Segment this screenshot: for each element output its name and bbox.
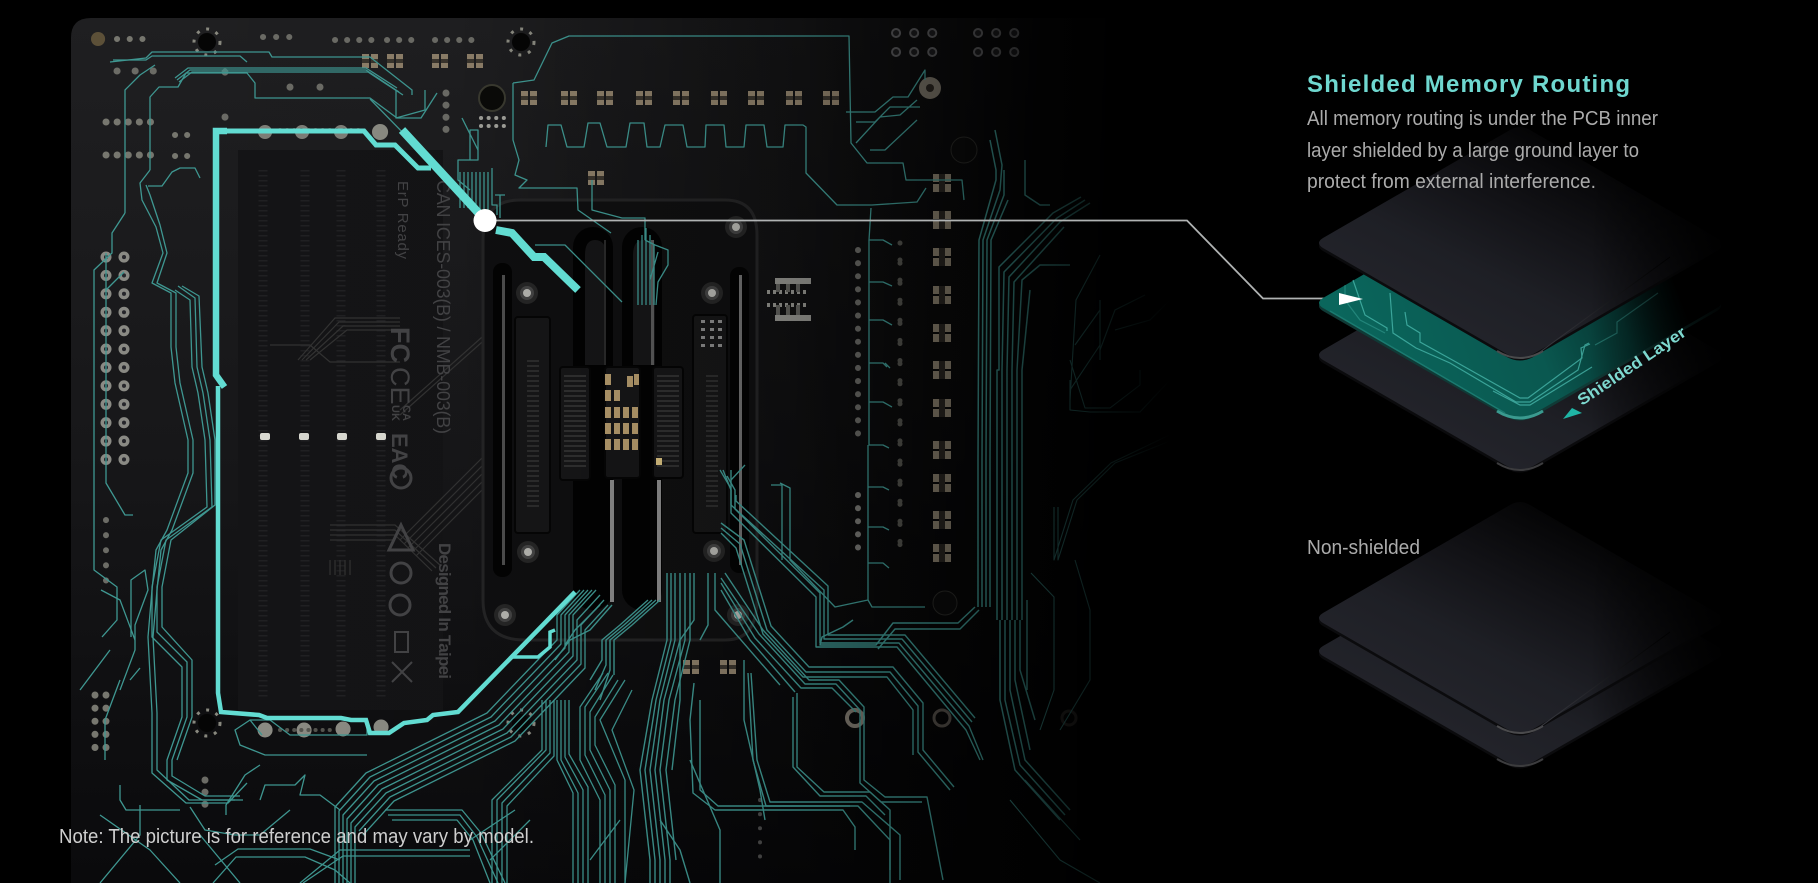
non-shielded label: Non-shielded [1307,537,1420,559]
bottom plate [1319,239,1721,472]
small power chips [767,278,811,321]
CPU socket bracket [483,200,757,640]
traces: left bottom [100,720,505,883]
shielded layer label: Shielded Layer [1575,324,1690,409]
socket screws [494,216,749,626]
routing lines on layer [1345,280,1658,405]
note: Note: The picture is for reference and may vary by model. [59,826,534,848]
memory slot area [238,150,490,710]
highlighted memory routing trace [216,130,578,733]
description [1307,108,1658,193]
right fade over non-shielded stack [1590,495,1730,785]
traces: centre bundles [660,470,983,883]
panel: motherboard [71,0,1345,883]
callout start dot [474,209,496,232]
gold capacitors [605,374,662,465]
description: layer shielded by a large ground layer to [1307,140,1639,162]
description: protect from external interference. [1307,171,1596,193]
capacitor pairs [362,54,951,674]
traces: top centre [458,36,964,607]
description: All memory routing is under the PCB inner [1307,108,1658,130]
silkscreen text and certification marks: CE [385,367,415,405]
silkscreen text and certification marks: CAN ICES-003(B) / NMB-003(B) [433,180,453,434]
latch pads [515,315,727,533]
centre chip blocks [560,367,683,480]
fade to black overlay [71,0,1251,883]
diagram: non-shielded stack [1319,495,1730,785]
silkscreen text and certification marks: UK [389,405,401,421]
callout arrowhead [1339,293,1363,305]
silkscreen text and certification marks: Designed In Taipei [435,543,454,679]
mounting holes [194,29,1076,736]
board surface [71,18,1250,883]
heading: Shielded Memory Routing [1307,71,1630,98]
traces: VRM vertical bus [820,130,1090,820]
silkscreen text and certification marks: EAC [387,433,412,480]
callout leader line [485,220,1345,298]
lower plate [1319,535,1721,768]
traces: socket zone accents [720,465,782,560]
right fade over shielded stack [1590,115,1730,485]
traces: far right faint [1010,255,1200,883]
top plate [1319,127,1721,360]
traces: below socket verticals [555,573,780,883]
silkscreen text and certification marks: FC [385,327,415,363]
silkscreen text and certification marks: ErP Ready [394,181,411,260]
teal PCB traces [80,36,1200,883]
right side slot [730,267,749,573]
teal shielded layer [1319,187,1721,420]
silkscreen text and certification marks [385,180,454,682]
shielded layer marker [1563,408,1582,419]
components: solder points and pins [95,33,1032,860]
upper plate [1319,502,1721,736]
diagram: shielded stack [1319,115,1730,485]
traces: left diagonal bus [335,590,634,883]
left side slot [493,263,512,577]
traces: upper left [80,52,437,803]
central slots [573,227,662,610]
silkscreen text and certification marks: CA [400,405,412,421]
memory slot end markers [260,433,386,440]
